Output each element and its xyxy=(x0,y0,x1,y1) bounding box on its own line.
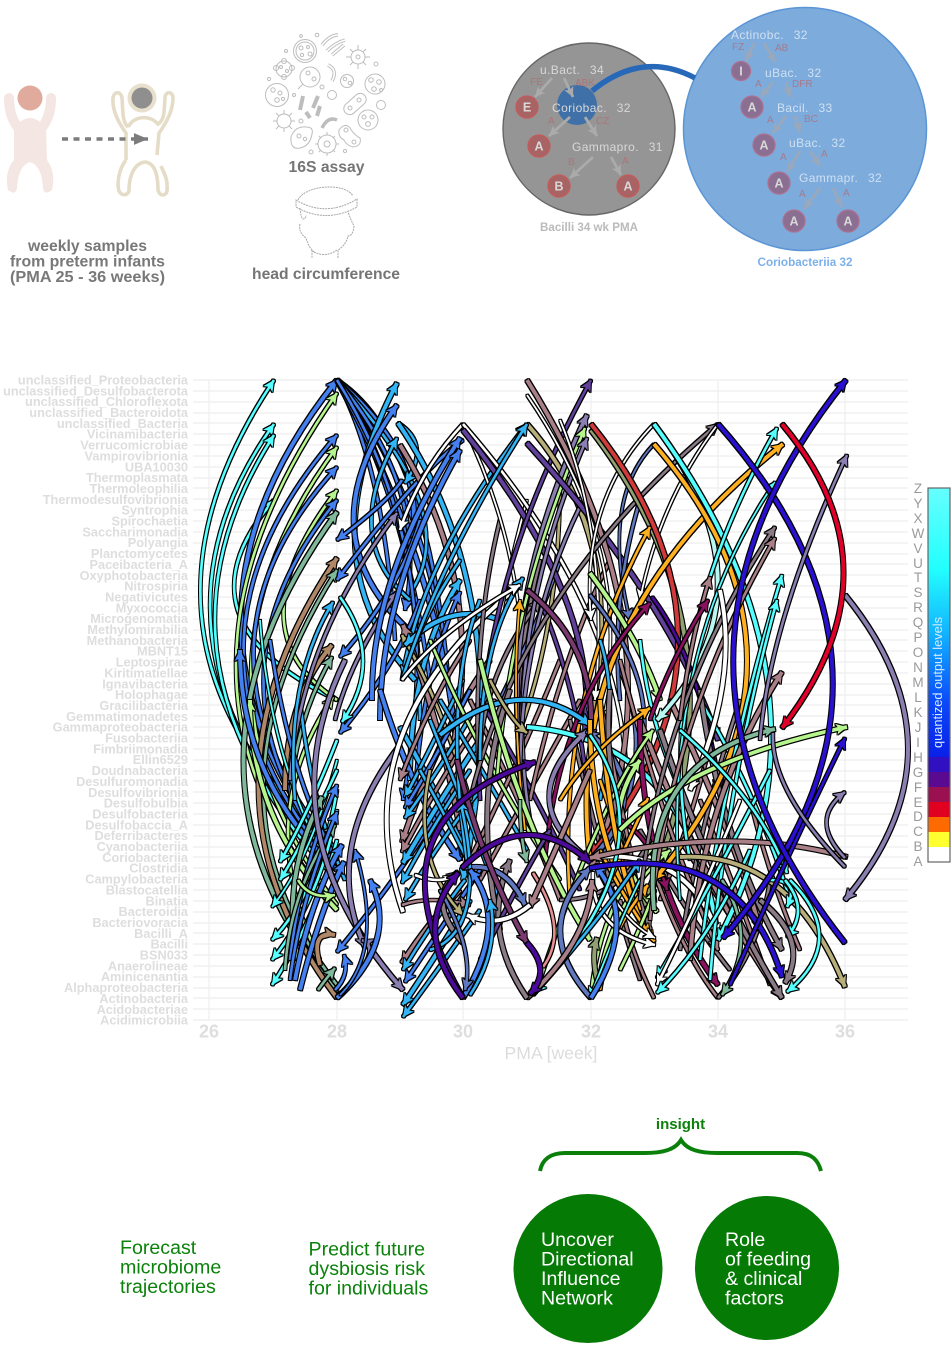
colour scale letters: Y xyxy=(913,496,923,511)
infant before sampling icon xyxy=(7,86,53,193)
text: 16S assay: 16S assay xyxy=(288,159,365,176)
colour scale letters: F xyxy=(914,780,922,795)
panel: gray Bacilli circle xyxy=(503,43,675,215)
y axis taxon labels: Saccharimonadia xyxy=(82,524,189,539)
colour scale letters: S xyxy=(913,585,923,600)
y axis taxon labels: Leptospirae xyxy=(116,655,188,670)
gray tree edge letters xyxy=(530,77,629,168)
y axis taxon labels: Alphaproteobacteria xyxy=(64,980,189,995)
colour scale title: quantized output levels xyxy=(930,617,945,748)
y axis taxon labels: Campylobacteria xyxy=(85,872,189,887)
icon: microbes xyxy=(266,33,386,156)
y axis taxon labels: Bacilli xyxy=(150,937,188,952)
y axis taxon labels: Thermoleophilia xyxy=(90,481,189,496)
text: forecast: microbiome xyxy=(120,1256,221,1278)
colour scale letters: N xyxy=(913,660,923,675)
y axis taxon labels: Desulfovibrionia xyxy=(88,785,189,800)
colour scale letters: P xyxy=(913,630,923,645)
text: weekly samples: from preterm infants xyxy=(10,254,165,270)
y axis taxon labels: Desulfobulbia xyxy=(104,796,189,811)
x axis week ticks: 26 xyxy=(199,1022,219,1042)
heading: insight: insight xyxy=(656,1116,705,1133)
blue tree edge letters: A xyxy=(755,79,762,90)
circle: role of feeding: factors xyxy=(725,1288,784,1310)
y axis taxon labels: unclassified_Bacteroidota xyxy=(29,405,189,420)
brace over insight circles xyxy=(540,1140,821,1171)
colour scale letters: Q xyxy=(913,615,923,630)
text: weekly samples: weekly samples xyxy=(27,238,147,255)
y axis taxon labels: Methanobacteria xyxy=(87,633,189,648)
circle: uncover network: Uncover xyxy=(541,1229,614,1251)
blue tree edge letters: DFR xyxy=(792,79,813,90)
x axis week ticks: 36 xyxy=(835,1022,855,1042)
colour scale letters: L xyxy=(914,690,922,705)
colour scale letters xyxy=(912,481,925,869)
y axis taxon labels: Syntrophia xyxy=(121,503,189,518)
gray tree nodes: A xyxy=(534,140,544,154)
circle: uncover network xyxy=(514,1194,662,1343)
colour scale letters: E xyxy=(913,795,923,810)
gray tree edge letters: ABK xyxy=(575,78,595,89)
chart grid xyxy=(193,380,908,1020)
y axis taxon labels: Myxococcia xyxy=(116,600,189,615)
text: weekly samples: (PMA 25 - 36 weeks) xyxy=(10,269,165,286)
blue tree edge letters: BC xyxy=(804,114,818,125)
gray tree labels: Gammapro. 31 xyxy=(572,140,663,154)
arrow: thick zoom connector xyxy=(592,67,695,91)
y axis taxon labels: Fusobacteriia xyxy=(105,730,189,746)
circle: role of feeding: Role xyxy=(725,1229,765,1251)
icon: head circumference xyxy=(296,187,357,258)
colour scale letters: W xyxy=(912,526,925,541)
y axis taxon labels: BSN033 xyxy=(140,948,188,962)
colour scale letters: I xyxy=(916,735,920,750)
blue tree edge letters: A xyxy=(780,152,787,163)
y axis taxon labels: Vicinamibacteria xyxy=(87,427,189,442)
colour scale letters: Z xyxy=(914,481,922,496)
text: forecast xyxy=(120,1237,221,1298)
panel: blue Coriobacteriia circle xyxy=(684,8,926,250)
blue tree nodes: A xyxy=(843,214,853,228)
colour scale letters: O xyxy=(913,645,923,660)
colour scale letters: D xyxy=(913,809,923,824)
gray tree edge letters: FE xyxy=(530,77,543,88)
y axis taxon labels: Planctomycetes xyxy=(91,546,188,561)
text: predict: Predict future xyxy=(308,1238,425,1260)
text: predict xyxy=(308,1238,429,1300)
y axis taxon labels: Acidobacteriae xyxy=(97,1002,188,1017)
panel sub-arrows: blue tree arrows xyxy=(746,43,842,209)
y axis taxon labels: Polyangia xyxy=(128,535,189,550)
y axis taxon labels: Nitrospiria xyxy=(124,579,189,594)
colour scale letters: X xyxy=(913,511,923,526)
y axis taxon labels: Paceibacteria_A xyxy=(89,557,188,572)
y axis taxon labels: Acidimicrobiia xyxy=(100,1013,189,1028)
y axis taxon labels: Deferribacteres xyxy=(94,828,188,843)
circle: uncover network: Influence xyxy=(541,1268,621,1290)
y axis taxon labels: Desulfuromonadia xyxy=(76,774,189,789)
blue tree nodes: A xyxy=(747,100,757,114)
x axis week ticks: 30 xyxy=(453,1022,473,1042)
colour scale letters: R xyxy=(913,600,923,615)
infant after sampling icon xyxy=(113,84,173,195)
x axis week ticks: 34 xyxy=(708,1022,728,1042)
colour scale letters: V xyxy=(913,541,923,556)
y axis taxon labels: Thermoplasmata xyxy=(86,470,189,485)
y axis taxon labels: Bacilli_A xyxy=(134,926,188,941)
y axis taxon labels: Gammaproteobacteria xyxy=(53,720,189,735)
colour scale letters: G xyxy=(913,765,923,780)
text: weekly samples xyxy=(10,238,165,286)
blue tree labels: Gammapr. 32 xyxy=(799,171,882,185)
y axis taxon labels: Thermodesulfovibrionia xyxy=(43,492,189,507)
y axis taxon labels: Verrucomicrobiae xyxy=(80,438,188,453)
circle: uncover network: Directional xyxy=(541,1248,634,1270)
blue tree edge letters: A xyxy=(843,188,850,199)
blue tree edge letters: A xyxy=(799,189,806,200)
circle: role of feeding: of feeding xyxy=(725,1248,811,1270)
text: forecast: Forecast xyxy=(120,1237,197,1259)
colour scale letters: M xyxy=(912,675,924,690)
y axis taxon labels: Ignavibacteria xyxy=(102,676,189,691)
blue tree labels: Bacil. 33 xyxy=(777,101,833,115)
y axis taxon labels: Clostridia xyxy=(129,861,189,876)
colour scale letters: H xyxy=(913,750,923,765)
y axis taxon labels: Methylomirabilia xyxy=(87,622,189,637)
colour scale letters: B xyxy=(913,839,923,854)
x axis week ticks: 32 xyxy=(581,1022,601,1042)
y axis taxon labels: Fimbriimonadia xyxy=(93,741,189,756)
gray tree edge letters: A xyxy=(548,116,555,127)
y axis taxon labels: Binatia xyxy=(145,893,189,908)
blue tree edge letters: A xyxy=(821,149,828,160)
y axis taxon labels: Actinobacteria xyxy=(99,991,189,1006)
gray tree labels: u.Bact. 34 xyxy=(540,63,604,77)
blue tree nodes: A xyxy=(789,214,799,228)
gray tree edge letters: A xyxy=(622,156,629,167)
blue tree nodes: I xyxy=(739,64,743,78)
colour scale letters: J xyxy=(915,720,921,735)
chart: directional influence network arrows xyxy=(200,380,908,1017)
text: head circumference: head circumference xyxy=(252,266,400,283)
y axis taxon labels: MBNT15 xyxy=(137,644,188,659)
blue tree edge letters: FZ xyxy=(732,42,744,53)
y axis taxon labels: Anaerolineae xyxy=(108,958,188,973)
y axis taxon labels: unclassified_Bacteria xyxy=(57,416,189,431)
gray tree edge letters: B xyxy=(568,157,575,168)
y axis taxon labels: Holophagae xyxy=(115,687,188,702)
y axis taxon labels: Ellin6529 xyxy=(133,752,188,767)
y axis taxon labels: Microgenomatia xyxy=(90,611,189,626)
circle: role of feeding xyxy=(695,1196,839,1340)
y axis taxon labels: Spirochaetia xyxy=(111,514,189,528)
x axis week ticks: 28 xyxy=(327,1022,347,1042)
y axis taxon labels: Gemmatimonadetes xyxy=(66,709,188,724)
blue tree labels: uBac. 32 xyxy=(789,136,846,150)
blue tree labels xyxy=(731,28,882,185)
colour scale letters: C xyxy=(913,824,923,839)
y axis taxon labels: Bacteriovoracia xyxy=(92,915,189,930)
gray tree nodes: B xyxy=(554,180,564,194)
blue tree nodes xyxy=(732,62,859,232)
y axis taxon labels: Aminicenantia xyxy=(101,969,189,984)
text: forecast: trajectories xyxy=(120,1276,216,1298)
colour scale bar xyxy=(928,488,950,862)
y axis taxon labels: Desulfobacteria xyxy=(92,806,189,822)
y axis taxon labels: Coriobacteriia xyxy=(102,850,189,865)
x axis title: PMA [week] xyxy=(505,1043,597,1063)
gray tree nodes: A xyxy=(623,180,633,194)
gray tree nodes: E xyxy=(523,100,531,114)
colour scale letters: K xyxy=(913,705,923,720)
y axis taxon labels: Cyanobacteriia xyxy=(97,839,189,854)
blue tree nodes: A xyxy=(759,138,769,152)
blue tree edge letters: A xyxy=(767,115,774,126)
colour scale letters: T xyxy=(914,570,922,585)
y axis taxon labels xyxy=(3,372,189,1028)
y axis taxon labels: Vampirovibrionia xyxy=(85,448,189,463)
blue tree edge letters: AB xyxy=(775,43,789,54)
blue tree nodes: A xyxy=(774,176,784,190)
y axis taxon labels: unclassified_Proteobacteria xyxy=(18,372,189,388)
circle: uncover network: Network xyxy=(541,1288,613,1310)
x axis week ticks xyxy=(199,1022,855,1042)
blue tree edge letters xyxy=(732,42,850,200)
gray tree labels: Coriobac. 32 xyxy=(552,101,631,115)
y axis taxon labels: Kiritimatiellae xyxy=(104,665,188,680)
y axis taxon labels: unclassified_Chloroflexota xyxy=(25,394,189,409)
text: predict: for individuals xyxy=(308,1278,429,1300)
y axis taxon labels: Doudnabacteria xyxy=(92,763,189,778)
gray tree edge letters: CZ xyxy=(596,116,609,127)
y axis taxon labels: Desulfobaccia_A xyxy=(85,817,188,832)
caption: Bacilli 34 wk PMA: Bacilli 34 wk PMA xyxy=(540,220,638,234)
circle: role of feeding: & clinical xyxy=(725,1268,802,1290)
arrow: dashed sampling arrow xyxy=(62,137,148,141)
gray tree arrows xyxy=(535,78,621,178)
gray tree labels xyxy=(540,63,663,154)
y axis taxon labels: Gracilibacteria xyxy=(99,698,189,713)
caption: Coriobacteriia 32: Coriobacteriia 32 xyxy=(758,255,853,269)
blue tree labels: Actinobc. 32 xyxy=(731,28,808,42)
y axis taxon labels: Oxyphotobacteria xyxy=(80,568,189,583)
y axis taxon labels: UBA10030 xyxy=(125,459,188,474)
y axis taxon labels: Bacteroidia xyxy=(119,904,189,919)
y axis taxon labels: unclassified_Desulfobacterota xyxy=(3,383,189,398)
y axis taxon labels: Negativicutes xyxy=(105,590,188,604)
colour scale letters: U xyxy=(913,556,923,571)
highlighted Coriobacteriia node xyxy=(557,85,597,125)
gray tree nodes xyxy=(516,96,639,197)
blue tree labels: uBac. 32 xyxy=(765,66,822,80)
text: predict: dysbiosis risk xyxy=(308,1258,425,1280)
y axis taxon labels: Blastocatellia xyxy=(106,882,189,897)
colour scale letters: A xyxy=(913,854,923,869)
